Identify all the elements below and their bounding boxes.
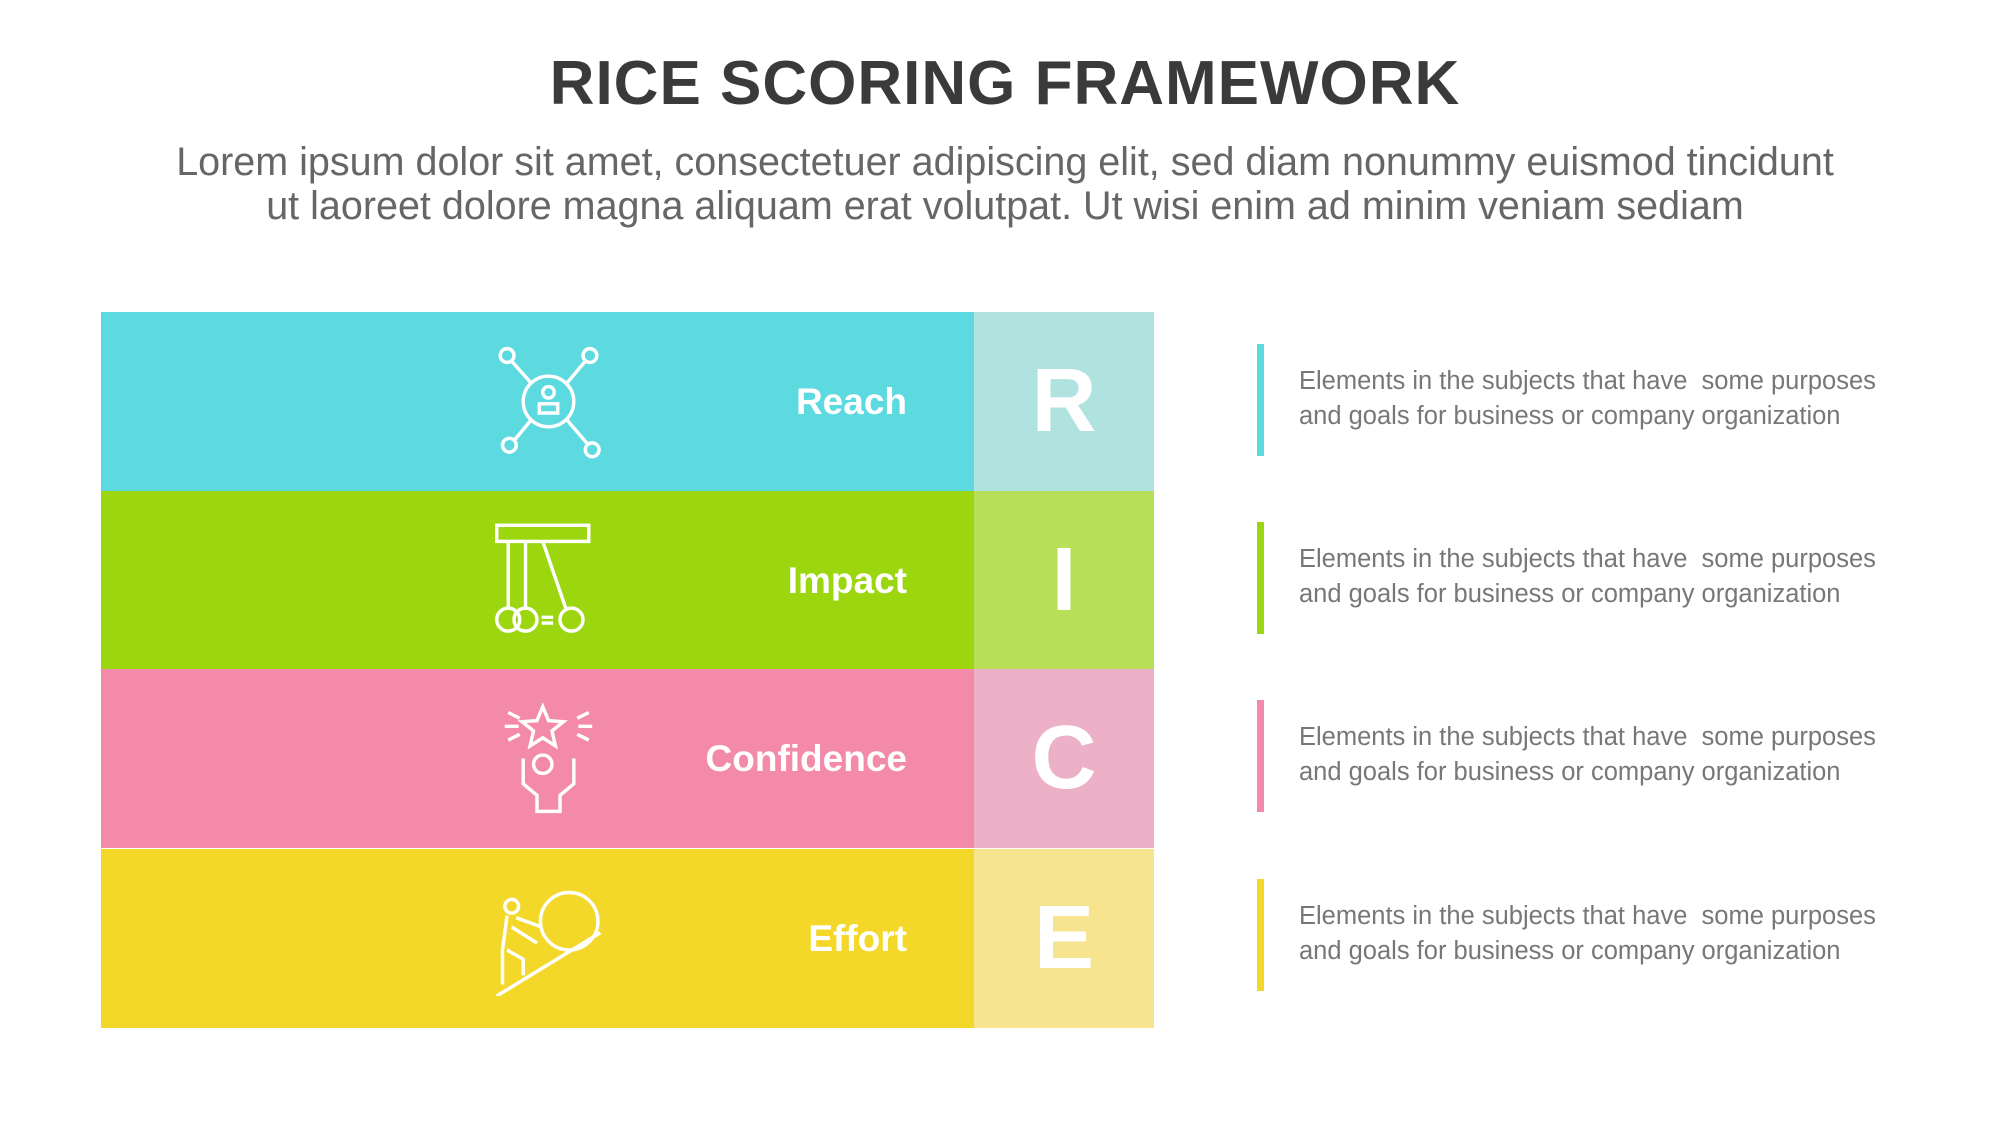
subtitle: ut laoreet dolore magna aliquam erat volutpat. Ut wisi enim ad minim veniam sediam xyxy=(266,184,1744,228)
subtitle xyxy=(176,140,1834,228)
description: reach: Elements in the subjects that have some purposes xyxy=(1299,367,1876,395)
description: confidence: and goals for business or company organization xyxy=(1299,758,1840,786)
letter I xyxy=(974,491,1154,670)
description: effort: and goals for business or company organization xyxy=(1299,937,1840,965)
description: effort xyxy=(1257,879,1876,991)
letter E xyxy=(974,849,1154,1028)
letter I: I xyxy=(1051,530,1076,630)
letter R: R xyxy=(1032,351,1096,451)
row: confidence xyxy=(101,669,1154,848)
title: RICE SCORING FRAMEWORK xyxy=(550,49,1460,118)
label: Reach: Reach xyxy=(796,381,907,422)
row: impact xyxy=(101,491,1154,669)
letter C xyxy=(974,669,1154,848)
subtitle: Lorem ipsum dolor sit amet, consectetuer adipiscing elit, sed diam nonummy euismod tincidunt xyxy=(176,140,1834,184)
description: reach xyxy=(1257,344,1876,456)
row: reach xyxy=(101,312,1154,491)
icon: newton cradle xyxy=(495,524,590,633)
description: reach: and goals for business or company organization xyxy=(1299,402,1840,430)
icon: star hands xyxy=(504,702,592,814)
label: Effort: Effort xyxy=(808,918,907,959)
letter R xyxy=(974,312,1154,491)
description: confidence: Elements in the subjects that have some purposes xyxy=(1299,723,1876,751)
row: effort xyxy=(101,849,1154,1028)
icon: pushing boulder xyxy=(496,890,602,996)
description: effort: Elements in the subjects that have some purposes xyxy=(1299,902,1876,930)
description: impact xyxy=(1257,522,1876,634)
description: impact: and goals for business or company organization xyxy=(1299,580,1840,608)
label: Impact: Impact xyxy=(788,560,907,601)
description: confidence xyxy=(1257,700,1876,812)
letter E: E xyxy=(1034,888,1094,988)
label: Confidence: Confidence xyxy=(706,738,907,779)
letter C: C xyxy=(1032,708,1096,808)
description: impact: Elements in the subjects that have some purposes xyxy=(1299,545,1876,573)
icon: network xyxy=(498,346,601,458)
